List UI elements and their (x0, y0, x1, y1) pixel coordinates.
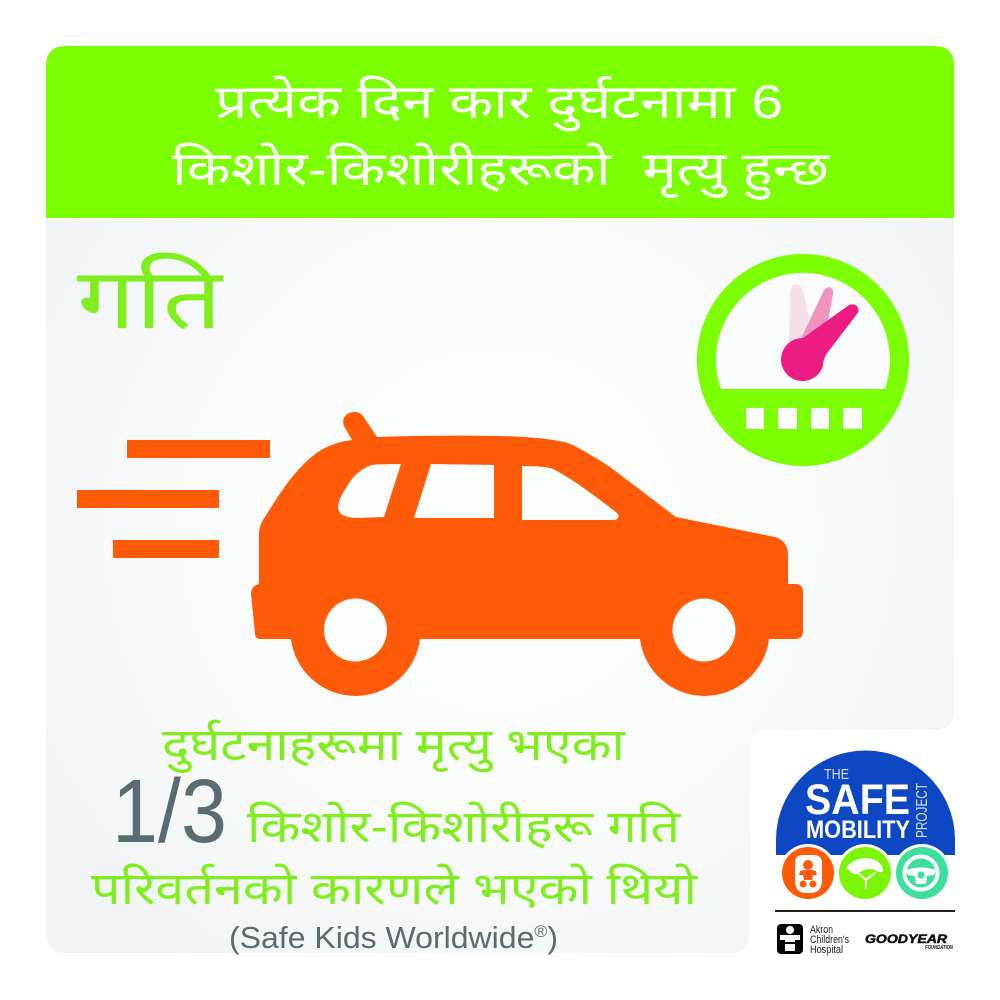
icon: steering wheel (893, 844, 951, 902)
heading: line 2: किशोर-किशोरीहरूको मृत्यु हुन्छ (172, 142, 830, 200)
icon: bike helmet (836, 844, 894, 902)
source note: ® (534, 922, 548, 941)
squares (746, 408, 862, 429)
logo: wordmark: THE (824, 766, 849, 783)
divider rule (775, 910, 955, 912)
panel: green header band (46, 46, 954, 218)
icon: speed lines (77, 440, 270, 558)
logo: Akron Children's Hospital: Children's (810, 934, 849, 946)
logo: Goodyear Foundation: FOUNDATION (925, 945, 953, 951)
logo: The Safe Mobility Project: PROJECT (914, 783, 931, 838)
needle: faded positions (789, 284, 809, 350)
text: line 3: परिवर्तनको कारणले भएको थियो (91, 863, 699, 914)
logo: Akron Children's Hospital (777, 924, 849, 956)
logo: The Safe Mobility Project: SAFE (805, 776, 910, 824)
car windows and wheels (324, 464, 736, 662)
source note: ) (547, 920, 558, 955)
statistic: 1/3: 1/3 (112, 762, 227, 862)
heading: speed: गति (77, 252, 225, 346)
icon: orange car (251, 412, 803, 696)
logo: Goodyear Foundation (865, 934, 953, 951)
panel: background card (46, 218, 954, 953)
needle: current position (781, 304, 858, 381)
icon: speedometer (697, 254, 909, 466)
heading: line 1: प्रत्येक दिन कार दुर्घटनामा 6 (215, 75, 783, 132)
logo: The Safe Mobility Project: MOBILITY (806, 816, 910, 844)
icon: car seat (779, 844, 837, 902)
logo: The Safe Mobility Project (775, 750, 955, 956)
logo: Goodyear Foundation: GOODYEAR (865, 934, 948, 946)
logo: Akron Children's Hospital: Hospital (810, 944, 843, 956)
source note: (Safe Kids Worldwide (229, 920, 525, 955)
text: line 1: दुर्घटनाहरूमा मृत्यु भएका (162, 719, 627, 773)
text: line 2: किशोर-किशोरीहरू गति (247, 801, 682, 852)
logo: Akron Children's Hospital: Akron (810, 924, 833, 936)
logo: blue dome (776, 750, 955, 855)
